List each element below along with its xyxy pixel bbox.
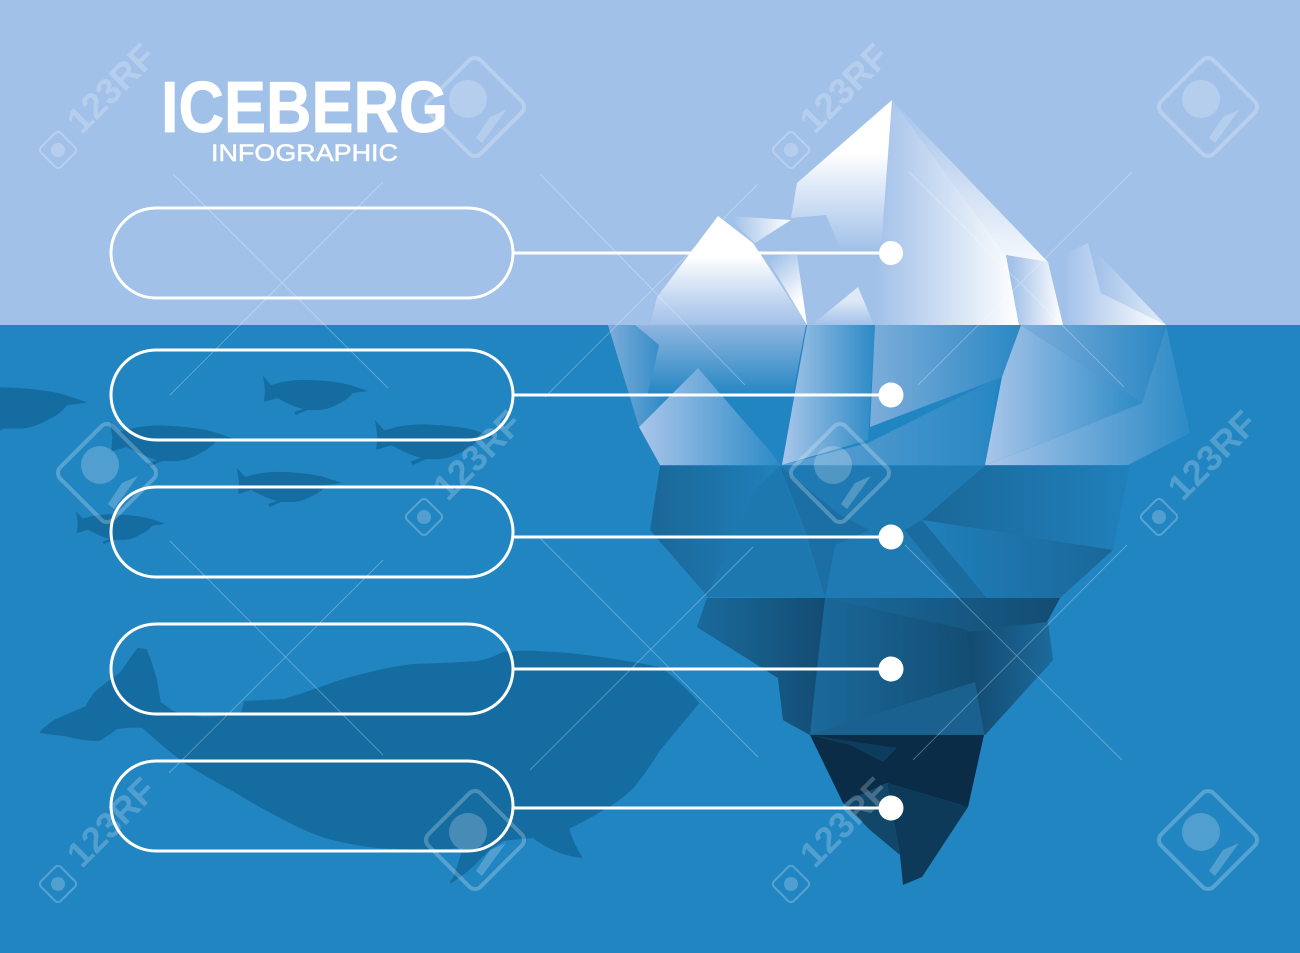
callout row 5 xyxy=(111,761,904,851)
penguin silhouettes xyxy=(0,376,496,544)
sea background xyxy=(0,325,1300,953)
callout row 2 xyxy=(111,350,904,440)
watermarks: 123RF xyxy=(791,769,897,875)
callout row 1 xyxy=(111,208,903,298)
watermarks: 123RF xyxy=(791,35,897,141)
sky background xyxy=(0,0,1300,325)
iceberg above water xyxy=(650,100,1166,325)
watermarks: 123RF xyxy=(58,769,164,875)
callout row 3 xyxy=(111,487,904,577)
callout row 4 xyxy=(111,624,904,714)
watermarks: 123RF xyxy=(424,402,530,508)
iceberg deep underwater layer xyxy=(697,598,1060,735)
whale silhouette xyxy=(41,649,698,882)
title: ICEBERG xyxy=(161,68,448,148)
iceberg darkest tip xyxy=(810,735,984,885)
iceberg xyxy=(608,100,1190,885)
iceberg shallow underwater layer xyxy=(608,325,1190,465)
watermarks: 123RF xyxy=(1159,402,1265,508)
iceberg mid underwater layer xyxy=(650,466,1130,598)
subtitle: INFOGRAPHIC xyxy=(211,140,398,167)
watermarks: 123RF xyxy=(58,35,164,141)
